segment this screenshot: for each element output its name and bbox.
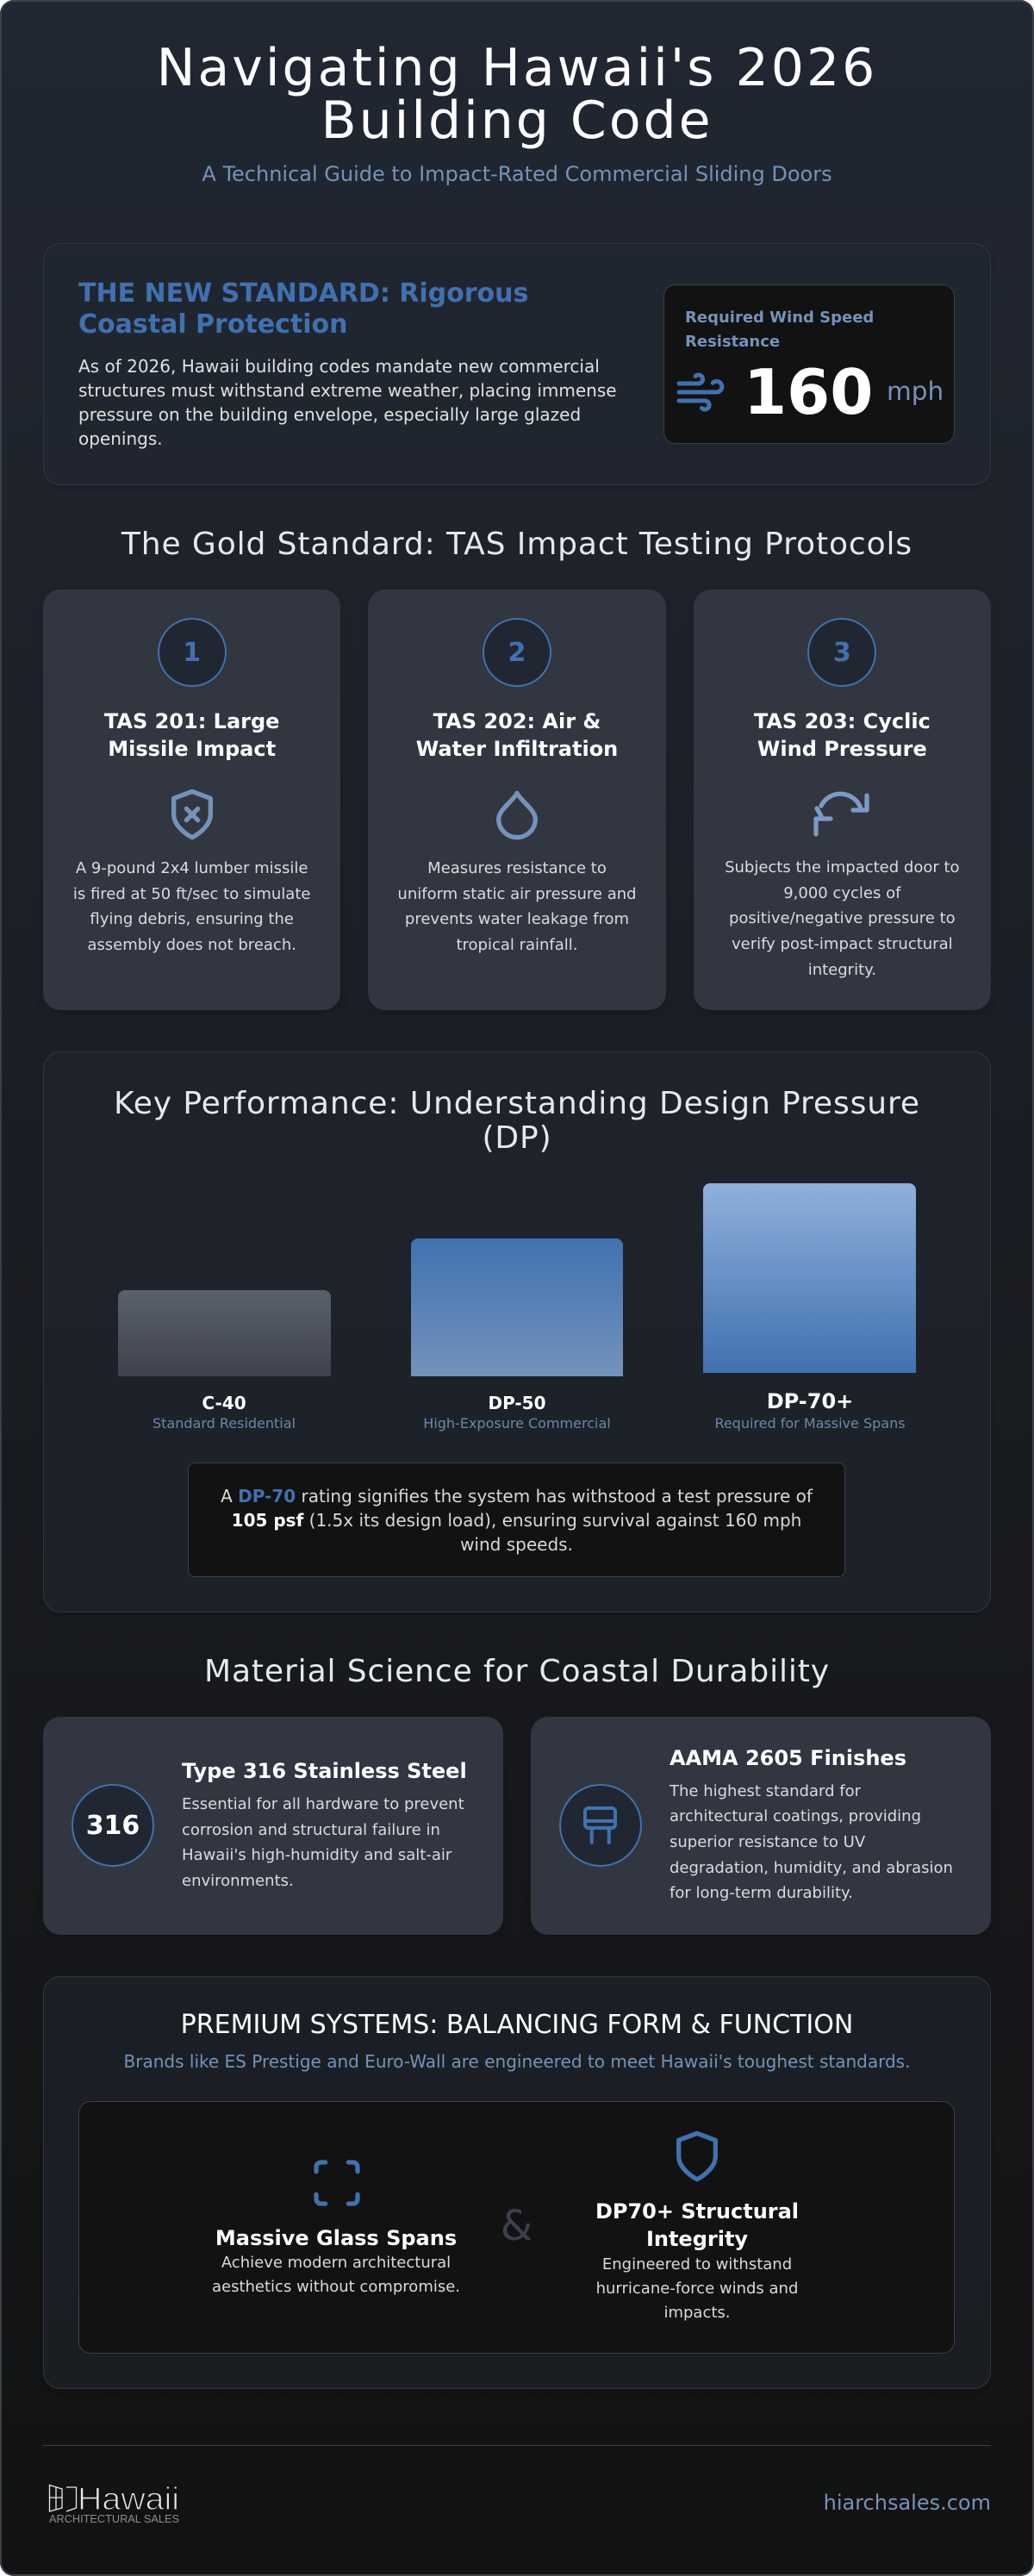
title: Building Code xyxy=(321,90,713,151)
card title: AAMA 2605 Finishes xyxy=(670,1746,906,1770)
card description: Measures resistance to xyxy=(427,859,607,877)
column title: DP70+ Structural xyxy=(595,2199,799,2224)
subheading: brands: Brands like ES Prestige and Euro-Wall are engineered to meet Hawaii's toughest standards. xyxy=(124,2051,910,2072)
bar chart xyxy=(118,1183,916,1431)
label: DP-70+: DP-70+ xyxy=(767,1389,853,1413)
logo: Hawaii xyxy=(78,2481,179,2517)
heading: design pressure: Key Performance: Understanding Design Pressure xyxy=(114,1086,920,1121)
column description: Achieve modern architectural xyxy=(221,2254,451,2272)
card description: flying debris, ensuring the xyxy=(90,910,294,928)
heading: the new standard: THE NEW STANDARD: Rigorous xyxy=(78,278,528,309)
icon: brush badge xyxy=(559,1784,642,1867)
column description: aesthetics without compromise. xyxy=(212,2278,460,2296)
bar group: DP-70+ xyxy=(703,1183,916,1431)
card description: A 9-pound 2x4 lumber missile xyxy=(76,859,308,877)
card description: verify post-impact structural xyxy=(732,935,953,953)
column description xyxy=(596,2255,798,2322)
card title xyxy=(104,709,279,761)
card title: Water Infiltration xyxy=(416,737,618,761)
column title: Integrity xyxy=(646,2227,748,2251)
card description xyxy=(669,1782,953,1902)
number badge 1 xyxy=(158,618,227,687)
heading: design pressure xyxy=(114,1086,920,1156)
number badge 2: 2 xyxy=(508,638,526,667)
sublabel: C-40: Standard Residential xyxy=(153,1415,296,1431)
column description: impacts. xyxy=(663,2304,731,2322)
card description: architectural coatings, providing xyxy=(670,1807,921,1825)
panel: premium systems xyxy=(43,1976,991,2389)
card description xyxy=(725,858,960,979)
icon: 316 badge xyxy=(72,1784,154,1867)
bar: DP-70+ xyxy=(703,1183,916,1373)
note text xyxy=(221,1486,813,1555)
column description xyxy=(212,2254,460,2296)
callout: DP-70 note xyxy=(188,1463,845,1577)
logo xyxy=(48,2481,179,2525)
card description: uniform static air pressure and xyxy=(397,885,637,903)
column: massive glass spans xyxy=(212,2160,460,2296)
wind speed label: Required Wind Speed xyxy=(685,309,874,327)
bar: C-40 xyxy=(118,1290,331,1375)
title xyxy=(157,38,877,151)
text block: standard description: pressure on the building envelope, especially large glazed xyxy=(78,404,581,425)
card description: for long-term durability. xyxy=(670,1884,853,1902)
panel: TAS 202 xyxy=(368,589,666,1010)
label: DP-50: DP-50 xyxy=(488,1393,546,1413)
heading: premium systems: PREMIUM SYSTEMS: BALANCING FORM & FUNCTION xyxy=(181,2010,853,2040)
column title: Massive Glass Spans xyxy=(215,2226,457,2250)
card description xyxy=(73,859,310,954)
logo: ARCHITECTURAL SALES xyxy=(49,2512,179,2525)
heading: the new standard: Coastal Protection xyxy=(78,309,348,340)
panel: stainless steel xyxy=(43,1717,503,1935)
bar: DP-50 xyxy=(411,1238,623,1375)
card title: TAS 203: Cyclic xyxy=(754,709,931,733)
card description: environments. xyxy=(182,1872,294,1890)
note text: wind speeds. xyxy=(460,1534,573,1555)
icon: scan frame xyxy=(314,2160,360,2206)
panel: TAS 203 xyxy=(694,589,991,1010)
card description: 9,000 cycles of xyxy=(783,884,900,902)
heading: design pressure: (DP) xyxy=(482,1120,552,1156)
text block: standard description: structures must withstand extreme weather, placing immense xyxy=(78,380,617,401)
panel: design pressure xyxy=(43,1051,991,1612)
heading: gold standard: The Gold Standard: TAS Impact Testing Protocols xyxy=(121,527,913,562)
sublabel: DP-70+: Required for Massive Spans xyxy=(714,1415,906,1431)
card title: Type 316 Stainless Steel xyxy=(182,1759,467,1783)
card description: prevents water leakage from xyxy=(405,910,629,928)
text block: standard description: As of 2026, Hawaii building codes mandate new commercial xyxy=(78,356,600,377)
card description: assembly does not breach. xyxy=(87,936,296,954)
number badge 3 xyxy=(807,618,876,687)
inner panel: form and function xyxy=(78,2101,955,2354)
card description: Hawaii's high-humidity and salt-air xyxy=(182,1846,452,1864)
panel: TAS 201 xyxy=(43,589,340,1010)
card title: TAS 201: Large xyxy=(104,709,279,733)
card description: Essential for all hardware to prevent xyxy=(182,1795,464,1813)
panel: AAMA finishes xyxy=(531,1717,991,1935)
icon: 316 badge: 316 xyxy=(86,1810,140,1841)
heading: the new standard xyxy=(78,278,528,340)
subtitle: A Technical Guide to Impact-Rated Commercial Sliding Doors xyxy=(202,162,832,186)
card description xyxy=(182,1795,464,1890)
bar group: DP-50 xyxy=(411,1238,623,1431)
wind speed unit: mph xyxy=(887,377,944,406)
card description: Subjects the impacted door to xyxy=(725,858,960,876)
icon: cyclic arrows xyxy=(813,791,869,837)
card description: positive/negative pressure to xyxy=(729,909,956,927)
note text: 105 psf (1.5x its design load), ensuring survival against 160 mph xyxy=(232,1510,801,1531)
card description xyxy=(397,859,637,954)
text block: standard description: openings. xyxy=(78,428,163,449)
number badge 1: 1 xyxy=(183,638,201,667)
website link: hiarchsales.com xyxy=(824,2491,991,2515)
text block: standard description xyxy=(78,356,617,449)
card title xyxy=(416,709,618,761)
note text: A DP-70 rating signifies the system has withstood a test pressure of xyxy=(221,1486,813,1506)
icon: wind xyxy=(677,372,724,412)
card description: degradation, humidity, and abrasion xyxy=(670,1859,953,1877)
card description: tropical rainfall. xyxy=(456,936,578,954)
callout: wind speed xyxy=(663,284,955,444)
card description: corrosion and structural failure in xyxy=(182,1821,440,1839)
number badge 3: 3 xyxy=(833,638,851,667)
card title: TAS 202: Air & xyxy=(433,709,601,733)
sublabel: DP-50: High-Exposure Commercial xyxy=(423,1415,611,1431)
title: Navigating Hawaii's 2026 xyxy=(157,38,877,98)
wind speed value: 160 xyxy=(744,356,873,428)
ampersand: & xyxy=(501,2202,533,2250)
card description: is fired at 50 ft/sec to simulate xyxy=(73,885,310,903)
number badge 2 xyxy=(483,618,551,687)
bar group: C-40 xyxy=(118,1290,331,1431)
column: structural integrity xyxy=(595,2130,799,2322)
card description: integrity. xyxy=(808,961,876,979)
icon: shield xyxy=(676,2130,718,2182)
panel: the new standard xyxy=(43,243,991,485)
card description: superior resistance to UV xyxy=(670,1833,865,1851)
card title: Missile Impact xyxy=(108,737,276,761)
card description: The highest standard for xyxy=(670,1782,861,1799)
card title xyxy=(754,709,931,761)
column title xyxy=(595,2199,799,2251)
column description: Engineered to withstand xyxy=(602,2255,792,2273)
column description: hurricane-force winds and xyxy=(596,2280,798,2298)
label: C-40: C-40 xyxy=(202,1393,246,1413)
icon: shield with x xyxy=(171,789,213,839)
card title: Wind Pressure xyxy=(757,737,927,761)
icon: water drop xyxy=(496,791,538,839)
wind speed label xyxy=(685,309,874,351)
wind speed label: Resistance xyxy=(685,333,780,351)
heading: material science: Material Science for Coastal Durability xyxy=(204,1654,830,1689)
